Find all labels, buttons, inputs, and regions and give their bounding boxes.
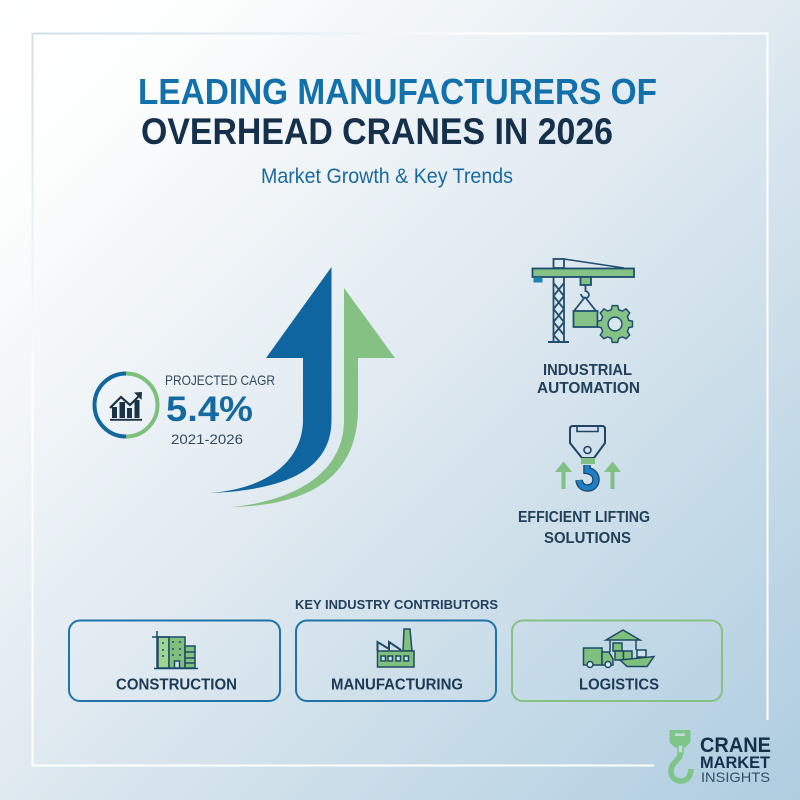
label: efficient lifting solutions: SOLUTIONS (544, 530, 631, 547)
logo: crane market insights: CRANE (700, 734, 771, 757)
logo: crane market insights: INSIGHTS (701, 769, 770, 785)
title (138, 71, 657, 152)
label: efficient lifting solutions (518, 509, 650, 547)
CAGR text: PROJECTED CAGR (165, 372, 275, 388)
icon: lifting hook with arrows (555, 426, 621, 489)
heading: key industry contributors: KEY INDUSTRY CONTRIBUTORS (295, 598, 498, 612)
label: industrial automation (537, 362, 640, 397)
icon: truck warehouse ship (584, 630, 654, 668)
icon: logo hook (670, 730, 691, 781)
blue arrow (210, 267, 332, 493)
green arrow (232, 288, 395, 507)
label: industrial automation: INDUSTRIAL (543, 362, 632, 379)
panel: logistics (512, 620, 722, 701)
label: industrial automation: AUTOMATION (537, 380, 640, 397)
CAGR text (165, 372, 275, 447)
label: CONSTRUCTION (116, 676, 237, 694)
CAGR ring icon (94, 374, 158, 436)
CAGR text: 2021-2026 (171, 431, 243, 447)
label: MANUFACTURING (331, 676, 463, 694)
growth arrows (210, 267, 395, 507)
subtitle: Market Growth & Key Trends (261, 165, 513, 188)
title: OVERHEAD CRANES IN 2026 (141, 111, 613, 152)
label: efficient lifting solutions: EFFICIENT LIFTING (518, 509, 650, 526)
CAGR text: 5.4% (166, 390, 253, 429)
icon: tower crane and gear (532, 259, 634, 342)
logo: crane market insights (670, 730, 771, 785)
gear (598, 306, 632, 342)
logo: crane market insights: MARKET (700, 753, 771, 772)
icon: buildings (152, 631, 198, 668)
label: LOGISTICS (579, 676, 659, 694)
icon: factory (378, 629, 414, 667)
title: LEADING MANUFACTURERS OF (138, 71, 657, 112)
panel: construction (69, 620, 280, 701)
panel: manufacturing (296, 620, 496, 701)
